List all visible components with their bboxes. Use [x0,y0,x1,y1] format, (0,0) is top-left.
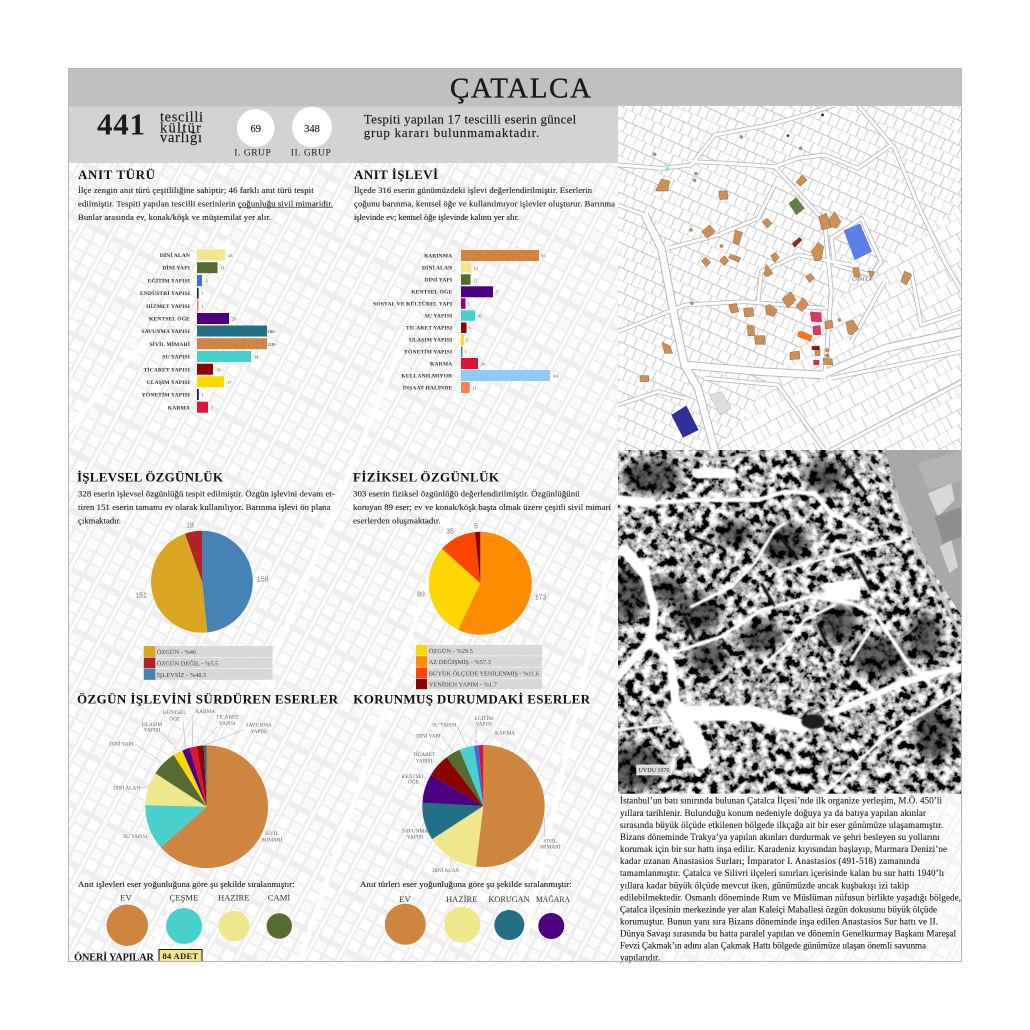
summary band [68,106,618,163]
bar chart: anıt türü [140,250,277,413]
bar chart: anıt işlevi: 3 [466,337,468,342]
badge: 84 adet: 84 ADET [162,952,199,961]
legend: fiziksel özgünlük: YENİDEN YAPIM - %1.7 [429,681,498,688]
ranking: çeşme: ÇEŞME [170,893,198,903]
ranking: ev [107,893,148,946]
pie chart: özgün işlevini sürdüren: ÖĞE [169,714,180,722]
heading: işlevsel özgünlük: İŞLEVSEL ÖZGÜNLÜK [77,470,224,485]
text: anıt işlevi: işlevinde ev; kentsel öğe işlevinde kalıntı yer alır. [354,212,519,222]
bar chart: anıt işlevi: ULAŞIM YAPISI [409,337,452,343]
pie chart: fiziksel özgünlük: 35 [446,528,454,536]
bar chart: anıt işlevi: 11 [472,385,476,390]
bar chart: anıt türü: 20 [232,316,237,322]
title: ÇATALCA [450,72,591,104]
bar chart: anıt işlevi: 11 [473,277,477,282]
legend: fiziksel özgünlük: ÖZGÜN - %29.5 [429,648,473,655]
text: işlevsel özgünlük: çıkmaktadır. [78,516,121,526]
text: işlevsel özgünlük: tiren 151 eserin tamamı ev olarak kullanılıyor. Barınma işlevi ön plana [78,502,331,512]
label: uydu 1970: UYDU 1970 [639,768,669,774]
heading: anıt türü: ANIT TÜRÜ [78,167,156,182]
bar chart: anıt işlevi: 95 [541,253,546,258]
pie chart: işlevsel özgünlük: 159 [257,576,269,584]
group II badge: 348 [304,124,320,135]
text block: ilçe tarihi: edilebilmektedir. Osmanlı döneminde Rum ve Müslüman nüfusun birlikte yaşadığı bölgede, [620,892,961,902]
bar chart: anıt türü: 1 [202,304,204,309]
group II badge [291,107,332,159]
text: anıt işlevleri sıralaması: Anıt işlevleri eser yoğunluğuna göre şu şekilde sıralanmıştır: [78,879,295,889]
note: grup kararı bulunmamaktadır. [364,125,539,140]
text block: ilçe tarihi: korumak için bir sur hattı inşa edilir. Karadeniz kıyısından başlayıp, Marmara Denizi’ne [620,844,947,854]
pie chart: özgün işlevini sürdüren: SAVUNMA [246,722,272,728]
bar chart: anıt türü: 34 [254,355,259,360]
pie chart: korunmuş durumdaki: KARMA [495,730,515,736]
ranking: hazire [218,893,249,941]
legend: işlevsel özgünlük: İŞLEVSİZ - %48.5 [157,672,206,679]
bar chart: anıt türü: EĞİTİM YAPISI [148,276,190,284]
ranking: mağara [536,894,571,939]
bar chart: anıt türü: 10 [216,367,221,372]
ranking: ev [385,894,426,945]
bar chart: anıt işlevi: 16 [477,313,482,318]
pie chart: korunmuş durumdaki: KENTSEL [402,774,425,780]
pie chart: korunmuş durumdaki: DİNİ YAPI [416,733,441,740]
text: anıt türleri sıralaması: Anıt türleri eser yoğunluğuna göre şu şekilde sıralanmıştır: [360,879,572,889]
pie chart: işlevsel özgünlük: 151 [135,592,147,600]
text block: ilçe tarihi: tamamlanmıştır. Çatalca ve Silivri ilçeleri sınırları içerisinde kalan bu sur hattı 1940’lı [620,868,944,878]
text: işlevsel özgünlük: 328 eserin işlevsel özgünlüğü tespit edilmiştir. Özgün işlevini devam et- [78,489,335,499]
panel: özgün işlevini sürdüren eserler [74,691,339,964]
bar chart: anıt işlevi: KULLANILMIYOR [401,373,453,379]
pie chart: özgün işlevini sürdüren: DİNİ ALAN [113,784,140,791]
bar chart: anıt türü: TİCARET YAPISI [144,366,190,373]
pie chart: korunmuş durumdaki: SİVİL [544,838,557,845]
bar chart: anıt işlevi: 37 [495,289,500,294]
heading: anıt işlevi: ANIT İŞLEVİ [354,167,438,182]
text: anıt türü: Bunlar arasında ev, konak/köşk ve müştemilat yer alır. [78,212,271,222]
label: uydu 1970 [637,765,671,775]
bar chart: anıt türü: 102+ [268,329,277,334]
panel: anıt türü [78,167,333,413]
map label: ÇATALCA [852,277,872,282]
buildings [640,114,912,438]
text: fiziksel özgünlük: koruyan 89 eser; ev ve konak/köşk başta olmak üzere çeşitli sivil mimari [353,502,612,512]
pie chart: özgün işlevini sürdüren: SİVİL [265,830,279,837]
text: fiziksel özgünlük: eserlerden oluşmaktadır. [353,516,441,526]
bar chart: anıt türü: DİNİ ALAN [160,252,190,259]
text: anıt işlevi [354,185,615,222]
bar chart: anıt işlevi: 20 [480,361,486,366]
pie chart: özgün işlevini sürdüren [109,709,282,868]
bar chart: anıt işlevi: SOSYAL VE KÜLTÜREL YAPI [373,300,452,307]
pie chart: korunmuş durumdaki: YAPISI [475,722,492,728]
pie chart: özgün işlevini sürdüren: MİMARİ [262,836,282,844]
ranking: cami: CAMİ [268,893,290,903]
bar chart: anıt türü: KARMA [168,405,190,411]
text block: ilçe tarihi: korumuştur. Bunun yanı sıra Bizans döneminde inşa edilen Anastasios Sur hattı ve II. [620,916,938,926]
pie chart: özgün işlevini sürdüren: TİCARET [216,714,239,720]
heading: korunmuş durumdaki eserler: KORUNMUŞ DURUMDAKİ ESERLER [353,691,591,706]
text block: ilçe tarihi: kadar uzanan Anastasios Surları; İmparator I. Anastasios (491-518) zamanında [620,856,920,866]
pie chart: korunmuş durumdaki: EĞİTİM [474,714,493,722]
ranking: ev: EV [120,893,133,903]
text: anıt türü [78,185,333,222]
pie chart: fiziksel özgünlük [417,524,547,635]
text: anıt işlevi: İlçede 316 eserin günümüzdeki işlevi değerlendirilmiştir. Eserlerin [354,185,593,195]
heading: fiziksel özgünlük: FİZİKSEL ÖZGÜNLÜK [353,470,500,485]
text: işlevsel özgünlük [78,489,335,526]
text: fiziksel özgünlük [353,489,612,526]
bar chart: anıt işlevi: 6 [468,325,472,330]
pie chart: fiziksel özgünlük: 5 [474,524,478,530]
group II badge: II. GRUP [291,149,331,159]
ranking: mağara: MAĞARA [536,894,571,904]
legend: işlevsel özgünlük [144,646,272,680]
bar chart: anıt işlevi: KARMA [430,361,452,367]
pie chart: özgün işlevini sürdüren: KENTSEL [163,710,186,716]
roads [618,450,962,793]
note: Tespiti yapılan 17 tescilli eserin güncel [364,112,577,127]
total count label: tescilli [160,109,203,125]
text: anıt işlevi: çoğunu barınma, kentsel öğe ve kullanılmıyor işlevler oluşturur. Barınma [354,198,615,208]
ranking: ev: EV [399,894,412,904]
text block: ilçe tarihi: Dünya Savaşı sırasında bu hatta paralel yapılan ve dönemin Genelkurmay Başkanı Mareşal [620,929,956,939]
bar chart: anıt işlevi: YÖNETİM YAPISI [404,348,452,355]
text block: ilçe tarihi [618,793,962,963]
bar chart: anıt işlevi: SU YAPISI [425,313,452,319]
bar chart: anıt işlevi: 5 [468,301,470,306]
note [364,112,577,140]
bar chart: anıt türü: 17 [227,380,232,385]
field and dark tree masses [605,450,962,790]
bar chart: anıt işlevi: DİNİ YAPI [425,276,452,283]
pie chart: korunmuş durumdaki: ÖĞE [408,777,419,785]
pie chart: korunmuş durumdaki: MİMARİ [540,844,561,851]
background: faint city plan [68,68,962,962]
text block: ilçe tarihi: sırasında büyük ölçüde etkilenen bölgede ilkçağa ait bir eser günümüze ulaşamamıştır. [620,820,943,830]
pie chart: özgün işlevini sürdüren: KARMA [195,709,215,715]
ranking: cami [267,893,292,939]
ranking: hazire: HAZİRE [218,893,249,903]
bar chart: anıt işlevi: 1 [464,349,467,354]
pie chart: fiziksel özgünlük: 89 [417,592,425,598]
text: fiziksel özgünlük: 303 eserin fiziksel özgünlüğü değerlendirilmiştir. Özgünlüğünü [353,489,580,499]
title band [68,68,962,106]
text block: ilçe tarihi: yıllara kadar büyük ölçüde mevcut iken, günümüzde ancak kuşbakışı izi takip [620,880,910,890]
bar chart: anıt türü: 1 [202,393,204,398]
pie chart: korunmuş durumdaki: DİNİ ALAN [432,867,459,874]
total count label [160,109,203,146]
label: öneri yapılar: ÖNERİ YAPILAR [74,950,154,964]
pie chart: korunmuş durumdaki: YAPISI [407,835,423,841]
map: çatalca plan [618,105,962,450]
text block: ilçe tarihi: Çatalca ilçesinin merkezinde yer alan Kaleiçi Mahallesi özgün dokusunu büyük ölçüde [620,904,937,914]
bar chart: anıt işlevi: İNŞAAT HALİNDE [403,384,452,391]
bar chart: anıt türü: DİNİ YAPI [162,265,190,272]
bar chart: anıt türü: SAVUNMA YAPISI [141,329,190,335]
pie chart: korunmuş durumdaki: TİCARET [413,751,436,758]
text block: ilçe tarihi: İstanbul’un batı sınırında bulunan Çatalca İlçesi’nde ilk organize yerleşim, M.Ö. 450’li [620,796,942,806]
legend: fiziksel özgünlük [416,645,542,689]
heading: özgün işlevini sürdüren eserler: ÖZGÜN İŞLEVİNİ SÜRDÜREN ESERLER [77,691,339,706]
legend: fiziksel özgünlük: AZ DEĞİŞMİŞ - %57.3 [429,658,491,666]
photo: uydu 1970 [605,450,962,794]
ranking: hazire: HAZİRE [446,894,477,904]
bar chart: anıt türü: 7 [211,405,214,410]
group I badge: I. GRUP [234,149,271,159]
badge: 84 adet [159,950,202,962]
panel: işlevsel özgünlük [77,470,335,680]
pie chart: özgün işlevini sürdüren: DİNİ YAPI [109,740,134,747]
text block: ilçe tarihi: yıllara tarihlenir. Bulunduğu konum nedeniyle doğuya ya da batıya yapılan akınlar [620,808,926,818]
ranking: korugan [488,894,530,940]
text block: ilçe tarihi: yapılarıdır. [620,953,660,963]
pie chart: korunmuş durumdaki: SU YAPISI [432,722,457,728]
bar chart: anıt türü: ENDÜSTRİ YAPISI [140,290,190,297]
ranking: hazire [444,894,480,943]
legend: fiziksel özgünlük: BÜYÜK ÖLÇÜDE YENİLENMİŞ - %11.6 [429,670,539,677]
text block: ilçe tarihi: Fevzi Çakmak’ın adını alan Çakmak Hattı bölgede günümüze ulaşan önemli savunma [620,941,926,951]
text: anıt türü: İlçe zengin anıt türü çeşitliliğine sahiptir; 46 farklı anıt türü tespit [78,185,314,195]
pie chart: korunmuş durumdaki: SAVUNMA [402,829,428,835]
pie chart: özgün işlevini sürdüren: YAPISI [250,729,267,735]
bar chart: anıt türü: ULAŞIM YAPISI [147,380,190,386]
group I badge: 69 [250,124,261,135]
pie chart: özgün işlevini sürdüren: YAPISI [219,721,236,727]
bar chart: anıt türü: 11 [220,266,225,271]
bar chart: anıt işlevi: BARINMA [424,253,452,259]
total count label: varlığı [160,130,202,146]
ranking: korugan: KORUGAN [488,894,530,904]
bar chart: anıt türü: KENTSEL ÖĞE [149,314,190,322]
bar chart: anıt türü: 18 [228,253,233,258]
bar chart: anıt türü: SİVİL MİMARİ [149,341,190,348]
total count label: kültür [160,120,201,136]
bar chart: anıt işlevi: TİCARET YAPISI [406,324,452,331]
pie chart: özgün işlevini sürdüren: YAPISI [144,728,160,734]
text: anıt türü: edilmiştir. Tespiti yapılan tescilli eserinlerin çoğunluğu sivil mimaridir. [78,198,333,208]
pie chart: işlevsel özgünlük: 18 [186,522,194,530]
bar chart: anıt işlevi [373,250,559,393]
pie chart: fiziksel özgünlük: 173 [535,594,547,602]
bar chart: anıt türü: 1 [202,291,204,296]
panel: anıt işlevi [354,167,615,393]
pie chart: korunmuş durumdaki: YAPISI [416,758,432,764]
bar chart: anıt işlevi: 12 [474,265,478,270]
text block: ilçe tarihi: Bizans döneminde Trakya’ya yapılan akınları durdurmak ve şehri besleyen su yollarını [620,832,940,842]
bar chart: anıt işlevi: DİNİ ALAN [422,264,452,271]
ranking: çeşme [166,893,202,944]
pie chart: işlevsel özgünlük [135,522,269,633]
total count: 441 [97,107,145,142]
legend: işlevsel özgünlük: ÖZGÜN DEĞİL - %5.5 [157,660,218,668]
bar chart: anıt türü: SU YAPISI [162,355,190,361]
panel: fiziksel özgünlük [353,470,612,689]
bar chart: anıt türü: HİZMET YAPISI [146,303,190,310]
panel: korunmuş durumdaki eserler [353,691,591,945]
pie chart: özgün işlevini sürdüren: SU YAPISI [123,834,148,840]
legend: işlevsel özgünlük: ÖZGÜN - %46 [157,649,196,656]
bar chart: anıt türü: 218+ [268,342,277,347]
bar chart: anıt işlevi: KENTSEL ÖĞE [411,287,452,295]
bar chart: anıt türü: 3 [206,278,208,283]
bar chart: anıt türü: YÖNETİM YAPISI [142,392,190,399]
pie chart: özgün işlevini sürdüren: ULAŞIM [142,722,162,728]
bar chart: anıt işlevi: 104 [552,373,559,378]
pie chart: korunmuş durumdaki [402,714,561,874]
group I badge [234,109,274,159]
